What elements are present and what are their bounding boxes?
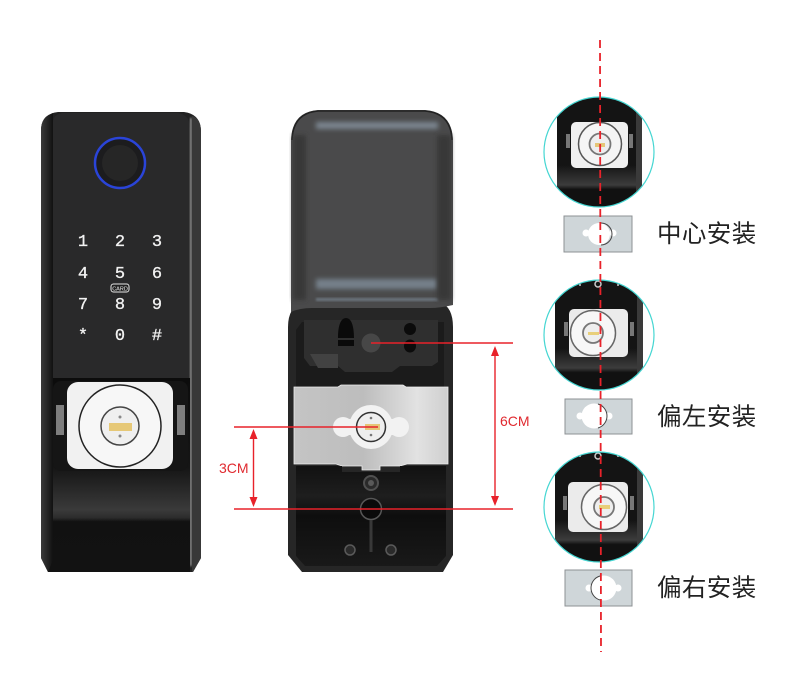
keypad digits: 6 bbox=[152, 265, 162, 284]
teal magnifier circle bbox=[555, 280, 643, 390]
lower housing bbox=[48, 378, 190, 572]
mounting plate bbox=[564, 216, 632, 252]
thumb-turn recess bbox=[53, 381, 188, 471]
front view of lock bbox=[41, 112, 201, 572]
battery cover bbox=[291, 110, 453, 312]
steel mounting plate with keyhole bbox=[294, 385, 448, 470]
keypad digits bbox=[78, 233, 162, 346]
red dashed center line bbox=[600, 40, 601, 652]
mounting posts bbox=[345, 476, 396, 555]
keypad digits: 3 bbox=[152, 233, 162, 252]
side tabs bbox=[56, 405, 185, 435]
mounting plate bbox=[565, 570, 632, 606]
arrow: 3CM bbox=[250, 429, 258, 507]
thumb-turn knob bbox=[67, 382, 173, 469]
dimension lines bbox=[219, 343, 530, 509]
keypad digits: 8 bbox=[115, 296, 125, 315]
label: 3CM: 3CM bbox=[219, 460, 249, 476]
detail: center installation bbox=[544, 97, 757, 252]
keypad digits: 5 bbox=[115, 265, 125, 284]
card reader badge bbox=[111, 284, 129, 292]
label: 6CM: 6CM bbox=[500, 413, 530, 429]
keypad face bbox=[53, 113, 190, 382]
lock body bbox=[41, 112, 201, 572]
label: 偏右安装 bbox=[657, 574, 757, 602]
keypad digits: 9 bbox=[152, 296, 162, 315]
arrow: 6CM bbox=[491, 346, 499, 506]
keypad digits: * bbox=[78, 327, 88, 346]
latch slot bbox=[338, 318, 354, 346]
keypad digits: 1 bbox=[78, 233, 88, 252]
teal magnifier circle bbox=[555, 452, 643, 562]
card reader badge: CARD bbox=[112, 286, 128, 292]
keypad digits: 4 bbox=[78, 265, 88, 284]
spindle hole bbox=[362, 334, 380, 352]
keypad digits: 7 bbox=[78, 296, 88, 315]
lower cavity bbox=[296, 466, 446, 566]
detail: right offset installation bbox=[544, 452, 757, 606]
keypad digits: # bbox=[152, 327, 162, 346]
label: 中心安装 bbox=[657, 220, 757, 248]
screw holes bbox=[404, 323, 416, 352]
label: 偏左安装 bbox=[657, 403, 757, 431]
keypad digits: 2 bbox=[115, 233, 125, 252]
teal magnifier circle bbox=[557, 98, 642, 206]
reference lines bbox=[234, 343, 513, 509]
lower body bbox=[288, 302, 453, 572]
fingerprint reader with blue ring bbox=[95, 138, 145, 188]
mounting plate bbox=[565, 399, 632, 434]
detail: left offset installation bbox=[544, 280, 757, 434]
back view of lock bbox=[288, 110, 453, 572]
upper mount area bbox=[296, 322, 444, 387]
keypad digits: 0 bbox=[115, 327, 125, 346]
